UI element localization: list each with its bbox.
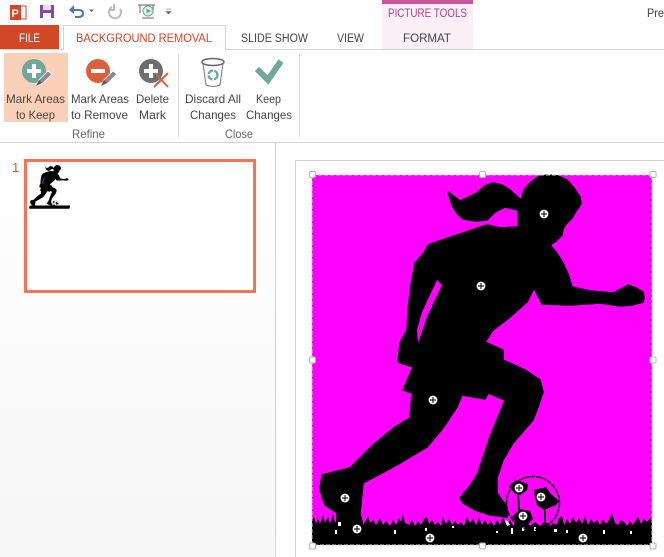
tab: file xyxy=(0,25,59,50)
tab: file: FILE xyxy=(19,31,40,45)
tab: slide show: SLIDE SHOW xyxy=(241,31,309,45)
button: mark areas to keep xyxy=(4,53,68,122)
icon: PowerPoint logo xyxy=(10,5,26,20)
button: keep changes xyxy=(246,61,292,122)
button: keep changes: Keep xyxy=(256,92,281,106)
button: discard all changes: Changes xyxy=(190,108,236,122)
button: delete mark: Delete xyxy=(136,92,169,106)
tab: background removal xyxy=(64,26,226,50)
keep marks xyxy=(341,210,587,542)
contextual tab: picture tools: PICTURE TOOLS xyxy=(388,8,467,20)
tab: background removal: BACKGROUND REMOVAL xyxy=(76,31,212,45)
slide number: 1 xyxy=(12,160,19,175)
contextual tab: picture tools: FORMAT xyxy=(403,31,452,45)
button: delete mark xyxy=(136,59,169,122)
quick access toolbar xyxy=(10,4,171,20)
group label: refine: Refine xyxy=(72,127,105,141)
slide thumbnail xyxy=(26,160,254,292)
button: mark areas to remove: Mark Areas xyxy=(71,92,129,106)
soccer player silhouette xyxy=(312,175,652,545)
button: mark areas to keep: to Keep xyxy=(16,108,55,122)
picture: removal preview xyxy=(310,172,656,549)
icon: PowerPoint logo: P xyxy=(12,8,19,20)
selection handles xyxy=(310,172,656,549)
button: keep changes: Changes xyxy=(246,108,292,122)
panel: slide editing area xyxy=(296,160,664,557)
button: delete mark: Mark xyxy=(139,108,167,122)
icon: save xyxy=(40,5,54,18)
icon: slide show start xyxy=(138,5,155,18)
ribbon xyxy=(4,53,300,141)
tab: view: VIEW xyxy=(337,31,365,45)
icon: customize arrow xyxy=(166,9,171,14)
button: discard all changes xyxy=(185,58,241,122)
icon: redo xyxy=(109,4,121,18)
button: discard all changes: Discard All xyxy=(185,92,241,106)
panel: slide thumbnails xyxy=(0,143,276,557)
group label: close: Close xyxy=(225,127,253,141)
button: mark areas to keep: Mark Areas xyxy=(6,92,65,106)
contextual tab: picture tools xyxy=(382,0,473,49)
button: mark areas to remove: to Remove xyxy=(71,108,128,122)
icon: undo xyxy=(69,5,94,17)
button: mark areas to remove xyxy=(71,59,129,122)
